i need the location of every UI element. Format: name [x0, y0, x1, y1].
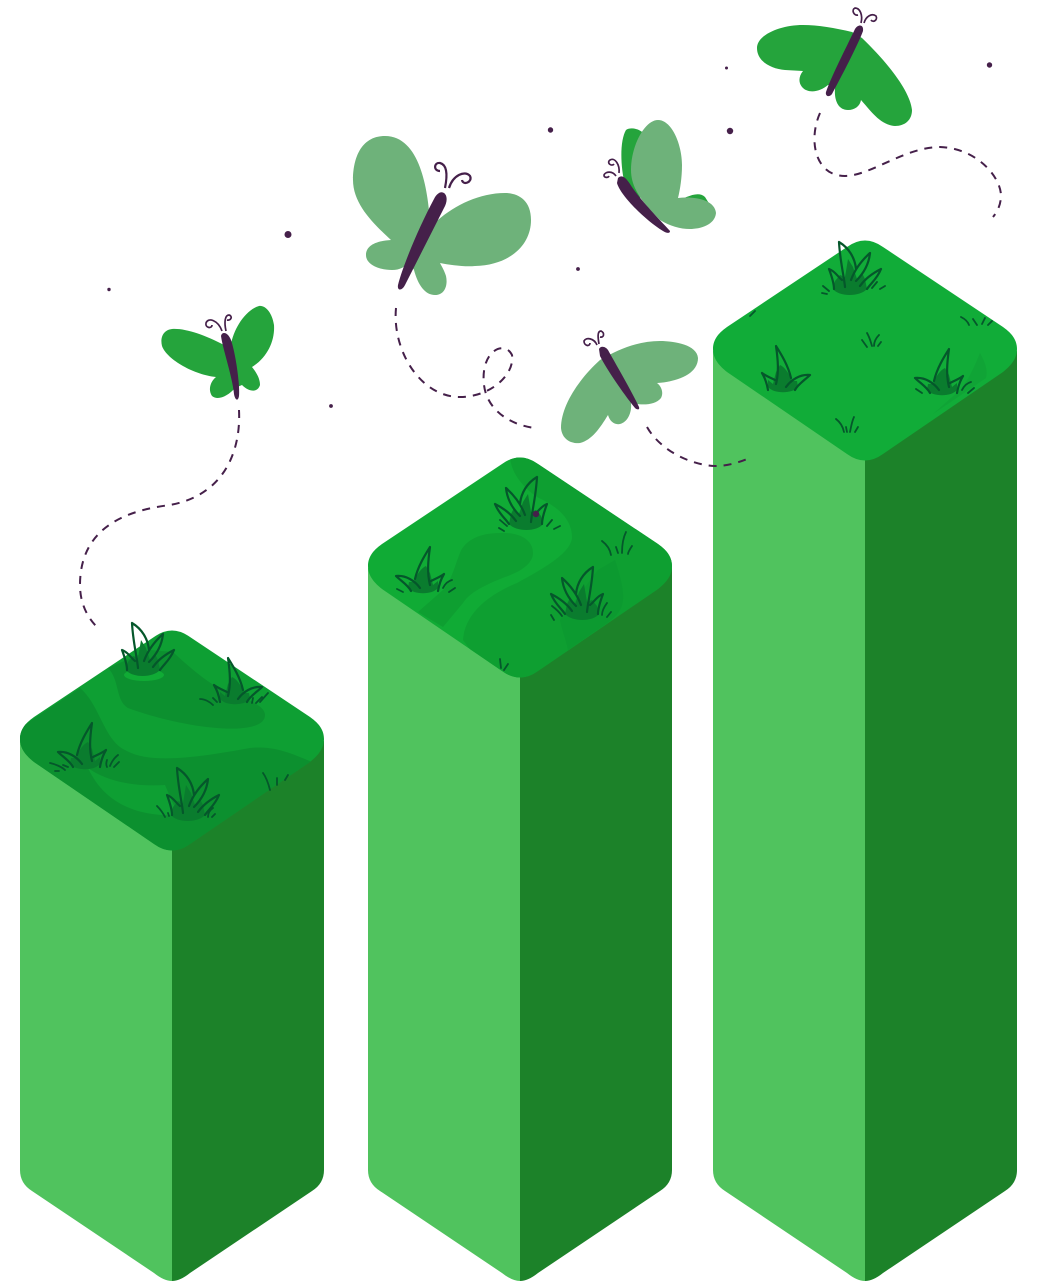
column 2 left face: [368, 568, 520, 1281]
dashed flight path: butterfly 2: [396, 308, 535, 428]
antennae: [206, 315, 231, 331]
scattered dots: [107, 62, 992, 408]
column 1: shortest bar: [20, 622, 324, 1281]
body: [826, 25, 863, 96]
butterfly 1: [161, 306, 274, 400]
wings: [561, 341, 698, 443]
antennae: [584, 331, 604, 345]
dashed flight path: butterfly 3: [647, 427, 747, 466]
body: [221, 333, 239, 400]
wings: [353, 136, 531, 295]
antennae: [435, 163, 471, 188]
column 1 left face: [20, 741, 172, 1281]
column 3 grass top: [713, 240, 1017, 460]
column 3 right face: [865, 351, 1017, 1281]
body: [617, 176, 670, 233]
butterfly 2: [353, 136, 531, 295]
column 2 right face: [520, 568, 672, 1281]
butterfly 3: [561, 331, 698, 443]
antennae: [853, 8, 876, 23]
rear wings: [621, 128, 710, 205]
pollen dot on tuft: [533, 511, 539, 517]
wings: [757, 25, 912, 126]
column 2: middle bar: [368, 458, 672, 1281]
column 2 grass tufts: [396, 477, 632, 670]
column 3 grass tufts: [750, 242, 992, 432]
wings: [161, 306, 274, 398]
column 1 grass top: [20, 630, 324, 850]
column 2 grass top: [368, 458, 672, 678]
dashed flight path: butterfly 1: [80, 410, 239, 627]
column 1 right face: [172, 741, 324, 1281]
antennae: [604, 159, 619, 177]
butterfly 4: [604, 120, 716, 233]
column 3 left face: [713, 351, 865, 1281]
column 3: tallest bar: [700, 225, 1030, 1281]
dashed flight path: butterfly 5: [814, 113, 1001, 217]
butterfly 5: [757, 8, 912, 126]
column 1 grass rim: [124, 669, 164, 681]
column 1 grass tufts: [50, 623, 288, 821]
body: [599, 347, 639, 409]
body: [398, 192, 447, 290]
front wings: [631, 120, 716, 229]
